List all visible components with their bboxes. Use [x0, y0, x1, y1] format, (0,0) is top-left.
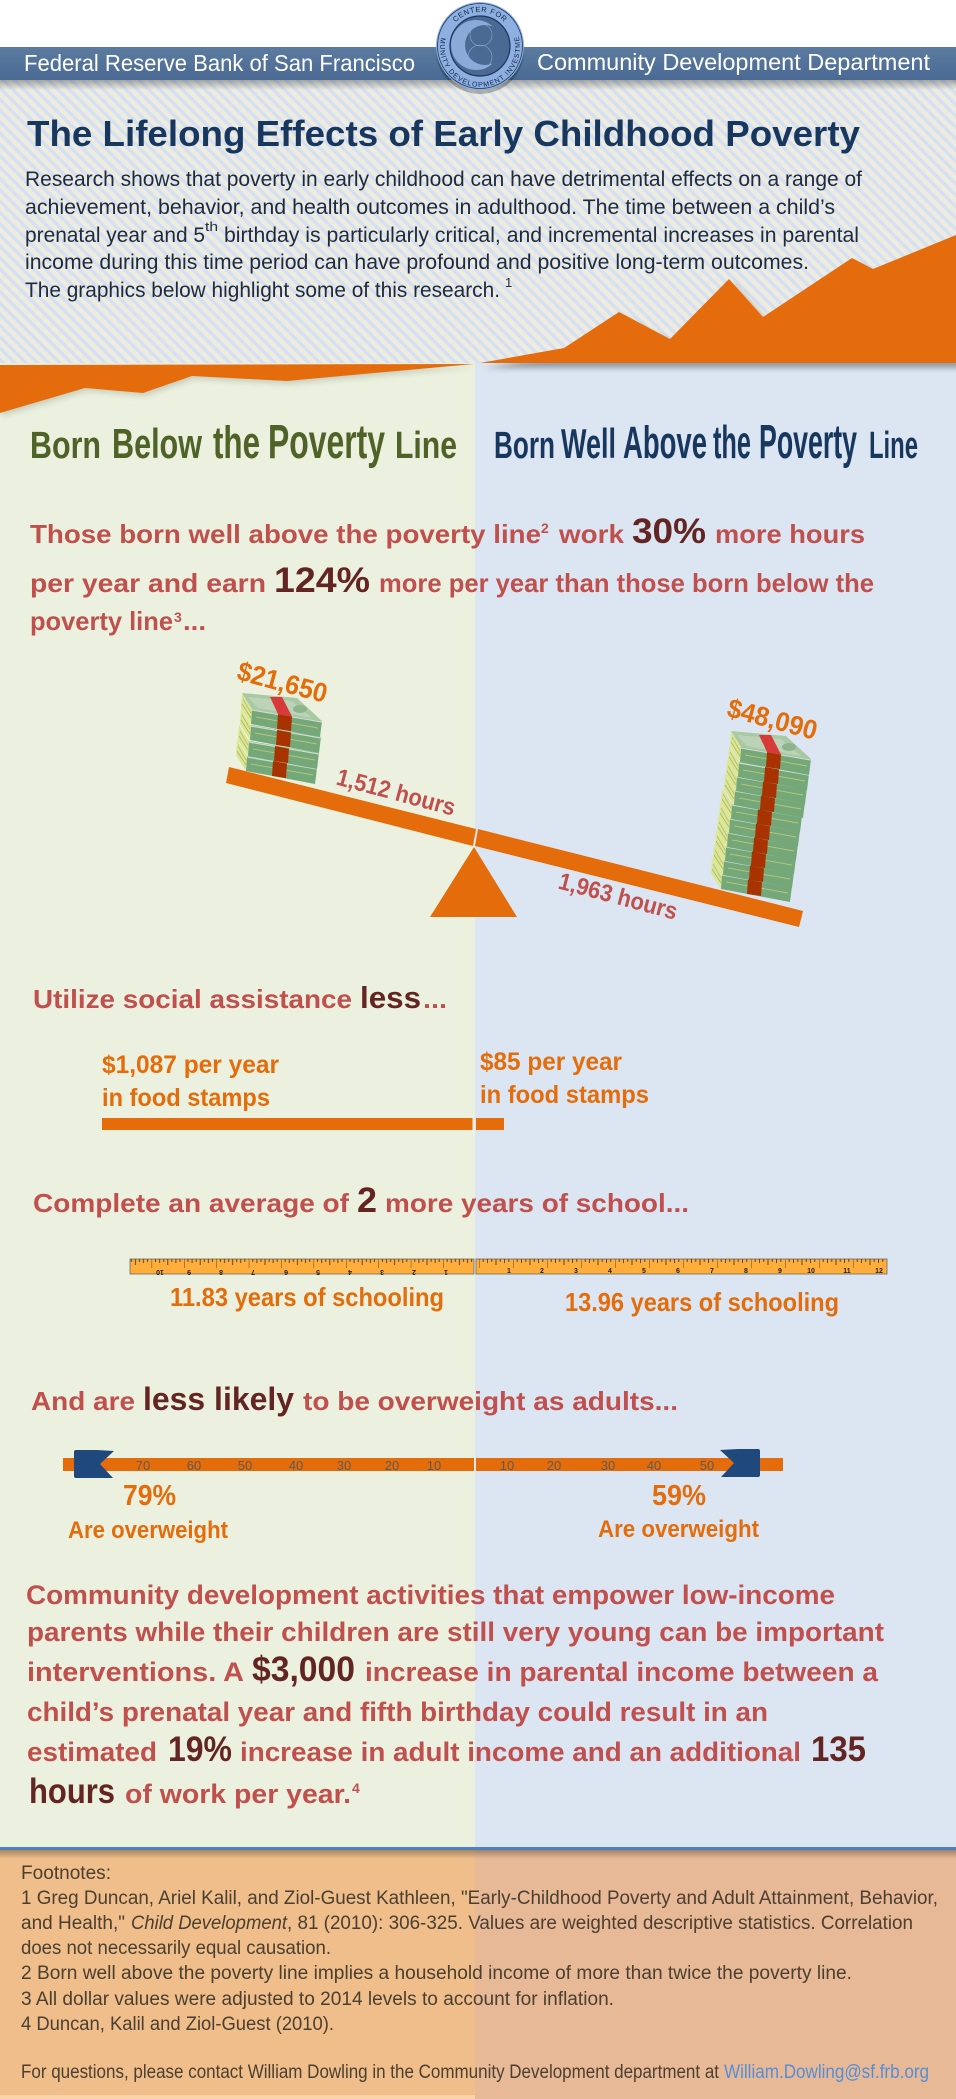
- chart: left ruler: 6: [284, 1268, 288, 1275]
- chart: right thermometer: 10: [500, 1458, 514, 1473]
- heading: social assistance: ...: [423, 984, 447, 1014]
- heading: born well above the poverty line: Poverty: [759, 416, 857, 469]
- heading: born well above the poverty line: [494, 416, 918, 469]
- chart: left thermometer: 60: [187, 1458, 201, 1473]
- chart: right ruler: 3: [574, 1268, 578, 1275]
- text block: community development conclusion: hours: [29, 1772, 115, 1811]
- text block: introduction: [25, 168, 862, 302]
- icon: large money stack: [711, 731, 811, 902]
- text block: introduction: prenatal year and 5: [25, 224, 205, 247]
- chart: right ruler: 5: [642, 1268, 646, 1275]
- heading: born below the poverty line: [30, 416, 457, 469]
- label: 79 percent overweight: [68, 1480, 228, 1544]
- text block: hours and earnings: work: [558, 519, 625, 549]
- icon: center for community development investments seal: CENTER FOR: [453, 6, 507, 22]
- label: 59 percent overweight: [598, 1480, 759, 1543]
- chart: right ruler: 10: [807, 1268, 815, 1275]
- text block: hours and earnings: poverty line: [30, 606, 173, 636]
- seesaw beam: [226, 767, 803, 927]
- label: 59 percent overweight: 59%: [652, 1480, 706, 1512]
- chart: food stamps bar: in food stamps: [480, 1081, 649, 1109]
- chart: food stamps bar: [102, 1048, 649, 1130]
- chart: left ruler: 9: [187, 1268, 191, 1275]
- text block: hours and earnings: 3: [174, 609, 182, 625]
- chart: right thermometer: [476, 1449, 783, 1477]
- text block: community development conclusion: increase in adult income and an additional: [240, 1737, 801, 1767]
- chart: seesaw with money stacks: [226, 656, 821, 927]
- chart: left ruler: [130, 1259, 474, 1275]
- label: 79 percent overweight: 79%: [123, 1480, 176, 1512]
- text block: hours and earnings: per year and earn: [30, 568, 266, 598]
- text block: hours and earnings: 124%: [274, 561, 370, 600]
- chart: left ruler: 1: [444, 1268, 448, 1275]
- text block: introduction: achievement, behavior, and health outcomes in adulthood. The time between a child’s: [25, 196, 835, 219]
- text block: introduction: 1: [505, 275, 512, 290]
- chart: food stamps bar: in food stamps: [102, 1084, 270, 1112]
- text block: footnotes: 1 Greg Duncan, Ariel Kalil, and Ziol-Guest Kathleen, "Early-Childhood Poverty and Adult Attainment, Behavior,: [21, 1888, 938, 1909]
- label: left schooling: 11.83 years of schooling: [170, 1282, 444, 1312]
- chart: right ruler: 12: [875, 1268, 883, 1275]
- chart: left thermometer: 70: [136, 1458, 150, 1473]
- header band: [0, 47, 956, 90]
- chart: right ruler: [476, 1259, 887, 1275]
- chart: left ruler: 7: [251, 1268, 255, 1275]
- heading: social assistance: [33, 980, 447, 1015]
- heading: born well above the poverty line: Well: [561, 420, 616, 467]
- text block: footnotes: Footnotes:: [21, 1863, 111, 1884]
- chart: right thermometer: 30: [601, 1458, 615, 1473]
- heading: social assistance: Utilize social assistance: [33, 984, 352, 1014]
- heading: born below the poverty line: the: [213, 417, 260, 468]
- chart: food stamps bar: $85 per year: [480, 1048, 622, 1076]
- chart: right ruler: 2: [540, 1268, 544, 1275]
- chart: left ruler: 8: [219, 1268, 223, 1275]
- text block: contact line: For questions, please contact William Dowling in the Community Development department at: [21, 2062, 720, 2083]
- label: 79 percent overweight: Are overweight: [68, 1517, 228, 1544]
- chart: right ruler: 4: [608, 1268, 612, 1275]
- text block: hours and earnings: more hours: [715, 519, 865, 549]
- heading: born below the poverty line: Line: [395, 425, 457, 467]
- label: high hours: 1,963 hours: [556, 868, 680, 926]
- chart: right thermometer: 40: [647, 1458, 661, 1473]
- text block: footnotes: does not necessarily equal causation.: [21, 1938, 331, 1959]
- text block: footnotes: 2 Born well above the poverty line implies a household income of more than twice the poverty line.: [21, 1963, 852, 1984]
- panel: striped intro background: [0, 80, 956, 363]
- chart: right ruler: 9: [778, 1268, 782, 1275]
- text block: introduction: Research shows that poverty in early childhood can have detrimental effects on a range of: [25, 168, 862, 191]
- chart: right thermometer: 50: [700, 1458, 714, 1473]
- text block: introduction: birthday is particularly critical, and incremental increases in parental: [224, 224, 859, 247]
- heading: overweight: [31, 1381, 678, 1417]
- label: right schooling: 13.96 years of schooling: [565, 1287, 839, 1317]
- chart: left thermometer: 50: [238, 1458, 252, 1473]
- heading: born below the poverty line: Below: [112, 420, 202, 467]
- chart: left thermometer: 20: [385, 1458, 399, 1473]
- heading: born below the poverty line: Born: [30, 425, 101, 467]
- text block: introduction: th: [205, 219, 218, 234]
- text block: community development conclusion: $3,000: [252, 1650, 355, 1689]
- heading: overweight: to be overweight as adults...: [303, 1386, 678, 1416]
- text block: footnotes: Child Development: [131, 1913, 288, 1934]
- chart: right ruler: 8: [744, 1268, 748, 1275]
- icon: small money stack: [236, 693, 322, 784]
- text block: hours and earnings: [30, 512, 874, 636]
- text block: footnotes: 4 Duncan, Kalil and Ziol-Guest (2010).: [21, 2014, 334, 2035]
- heading: born well above the poverty line: Above: [623, 417, 707, 468]
- text block: community development conclusion: estimated: [27, 1737, 157, 1767]
- text block: introduction: income during this time period can have profound and positive long-term outcomes.: [25, 251, 809, 274]
- heading: born well above the poverty line: the: [713, 416, 751, 468]
- chart: left thermometer: 30: [337, 1458, 351, 1473]
- chart: rising income mountain: [480, 235, 956, 363]
- text block: community development conclusion: [26, 1580, 884, 1811]
- heading: born below the poverty line: Poverty: [268, 416, 385, 469]
- header band: Federal Reserve Bank of San Francisco: [24, 50, 415, 76]
- text block: contact line: William.Dowling@sf.frb.org: [724, 2062, 929, 2083]
- chart: right thermometer: 20: [547, 1458, 561, 1473]
- heading: born well above the poverty line: Line: [869, 425, 918, 467]
- text block: hours and earnings: 2: [541, 520, 549, 536]
- text block: community development conclusion: 135: [811, 1730, 866, 1769]
- chart: left ruler: 2: [412, 1268, 416, 1275]
- header band: Community Development Department: [537, 49, 931, 75]
- fulcrum triangle: [430, 847, 517, 917]
- heading: overweight: less likely: [143, 1381, 294, 1417]
- text block: hours and earnings: ...: [183, 606, 206, 636]
- text block: hours and earnings: more per year than those born below the: [379, 568, 874, 598]
- text block: hours and earnings: Those born well above the poverty line: [30, 519, 541, 549]
- chart: right ruler: 7: [710, 1268, 714, 1275]
- chart: left thermometer: 10: [427, 1458, 441, 1473]
- heading: years of school: more years of school...: [385, 1188, 689, 1218]
- text block: community development conclusion: of work per year.: [125, 1779, 351, 1809]
- chart: left ruler: 3: [380, 1268, 384, 1275]
- chart: food stamps bar: $1,087 per year: [102, 1051, 279, 1079]
- chart: falling income slope: [0, 364, 474, 413]
- label: 59 percent overweight: Are overweight: [598, 1516, 759, 1543]
- heading: years of school: Complete an average of: [33, 1188, 349, 1218]
- text block: footnotes: , 81 (2010): 306-325. Values are weighted descriptive statistics. Correlation: [287, 1913, 913, 1934]
- text block: hours and earnings: 30%: [632, 512, 706, 551]
- label: low hours: 1,512 hours: [334, 764, 458, 822]
- text block: footnotes: and Health,": [21, 1913, 125, 1934]
- text block: footnotes: [21, 1863, 938, 2035]
- chart: left thermometer: [63, 1450, 474, 1478]
- chart: left ruler: 5: [316, 1268, 320, 1275]
- chart: left thermometer: 40: [289, 1458, 303, 1473]
- heading: social assistance: less: [360, 980, 421, 1015]
- text block: community development conclusion: 19%: [168, 1730, 232, 1769]
- chart: left ruler: 4: [348, 1268, 352, 1275]
- heading: born well above the poverty line: Born: [494, 425, 555, 467]
- panel: born above poverty line column: [475, 363, 956, 1853]
- icon: center for community development investments seal: [436, 2, 524, 94]
- label: high income: $48,090: [724, 693, 821, 746]
- panel: born below poverty line column: [0, 363, 475, 1853]
- text block: community development conclusion: parents while their children are still very young can be important: [27, 1617, 884, 1647]
- chart: right ruler: 1: [507, 1268, 511, 1275]
- text block: community development conclusion: Community development activities that empower low-income: [26, 1580, 835, 1610]
- text block: community development conclusion: interventions. A: [27, 1657, 244, 1687]
- label: low income: $21,650: [234, 656, 331, 709]
- text block: community development conclusion: child’s prenatal year and fifth birthday could result in an: [27, 1697, 768, 1727]
- text block: community development conclusion: increase in parental income between a: [365, 1657, 879, 1687]
- heading: overweight: And are: [31, 1386, 135, 1416]
- heading: years of school: [33, 1181, 689, 1220]
- heading: years of school: 2: [357, 1181, 377, 1220]
- text block: community development conclusion: 4: [352, 1780, 360, 1796]
- panel: footer background: [0, 1847, 956, 2099]
- text block: footnotes: 3 All dollar values were adjusted to 2014 levels to account for inflation.: [21, 1989, 614, 2010]
- chart: right ruler: 6: [676, 1268, 680, 1275]
- title: The Lifelong Effects of Early Childhood Poverty: [27, 113, 860, 154]
- chart: right ruler: 11: [843, 1268, 851, 1275]
- text block: introduction: The graphics below highlight some of this research.: [25, 279, 500, 302]
- chart: left ruler: 10: [156, 1268, 164, 1275]
